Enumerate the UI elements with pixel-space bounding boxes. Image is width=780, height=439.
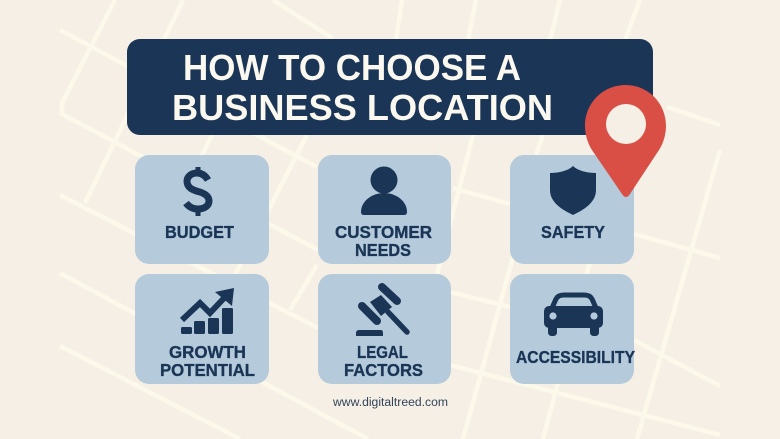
panel: growth potential — [135, 274, 269, 384]
icon: gavel — [356, 287, 407, 336]
website url: www.digitaltreed.com — [332, 397, 448, 409]
icon: dollar sign — [186, 167, 209, 216]
label: legal factors — [344, 342, 423, 380]
label: legal factors: LEGAL — [357, 342, 408, 362]
label: safety: SAFETY — [541, 222, 605, 242]
label: customer needs: CUSTOMER — [335, 222, 432, 242]
panel: customer needs — [318, 155, 451, 264]
label: customer needs: NEEDS — [355, 240, 411, 260]
label: legal factors: FACTORS — [344, 360, 423, 380]
icon: location pin — [585, 85, 666, 197]
label: accessibility: ACCESSIBILITY — [516, 347, 635, 367]
label: budget: BUDGET — [165, 222, 234, 242]
icon: growth chart — [181, 288, 234, 334]
label: growth potential — [160, 342, 255, 380]
label: customer needs — [335, 222, 432, 260]
title text: BUSINESS LOCATION — [172, 87, 553, 128]
title text: HOW TO CHOOSE A — [183, 47, 521, 88]
panel: legal factors — [318, 274, 451, 384]
label: growth potential: GROWTH — [169, 342, 246, 362]
icon: car — [544, 295, 603, 336]
title text — [172, 47, 553, 128]
title banner — [127, 39, 653, 135]
icon: person — [361, 166, 407, 215]
label: growth potential: POTENTIAL — [160, 360, 255, 380]
panel: accessibility — [510, 274, 635, 384]
panel: budget — [135, 155, 269, 264]
panel: safety — [510, 155, 634, 264]
icon: shield — [550, 166, 596, 215]
